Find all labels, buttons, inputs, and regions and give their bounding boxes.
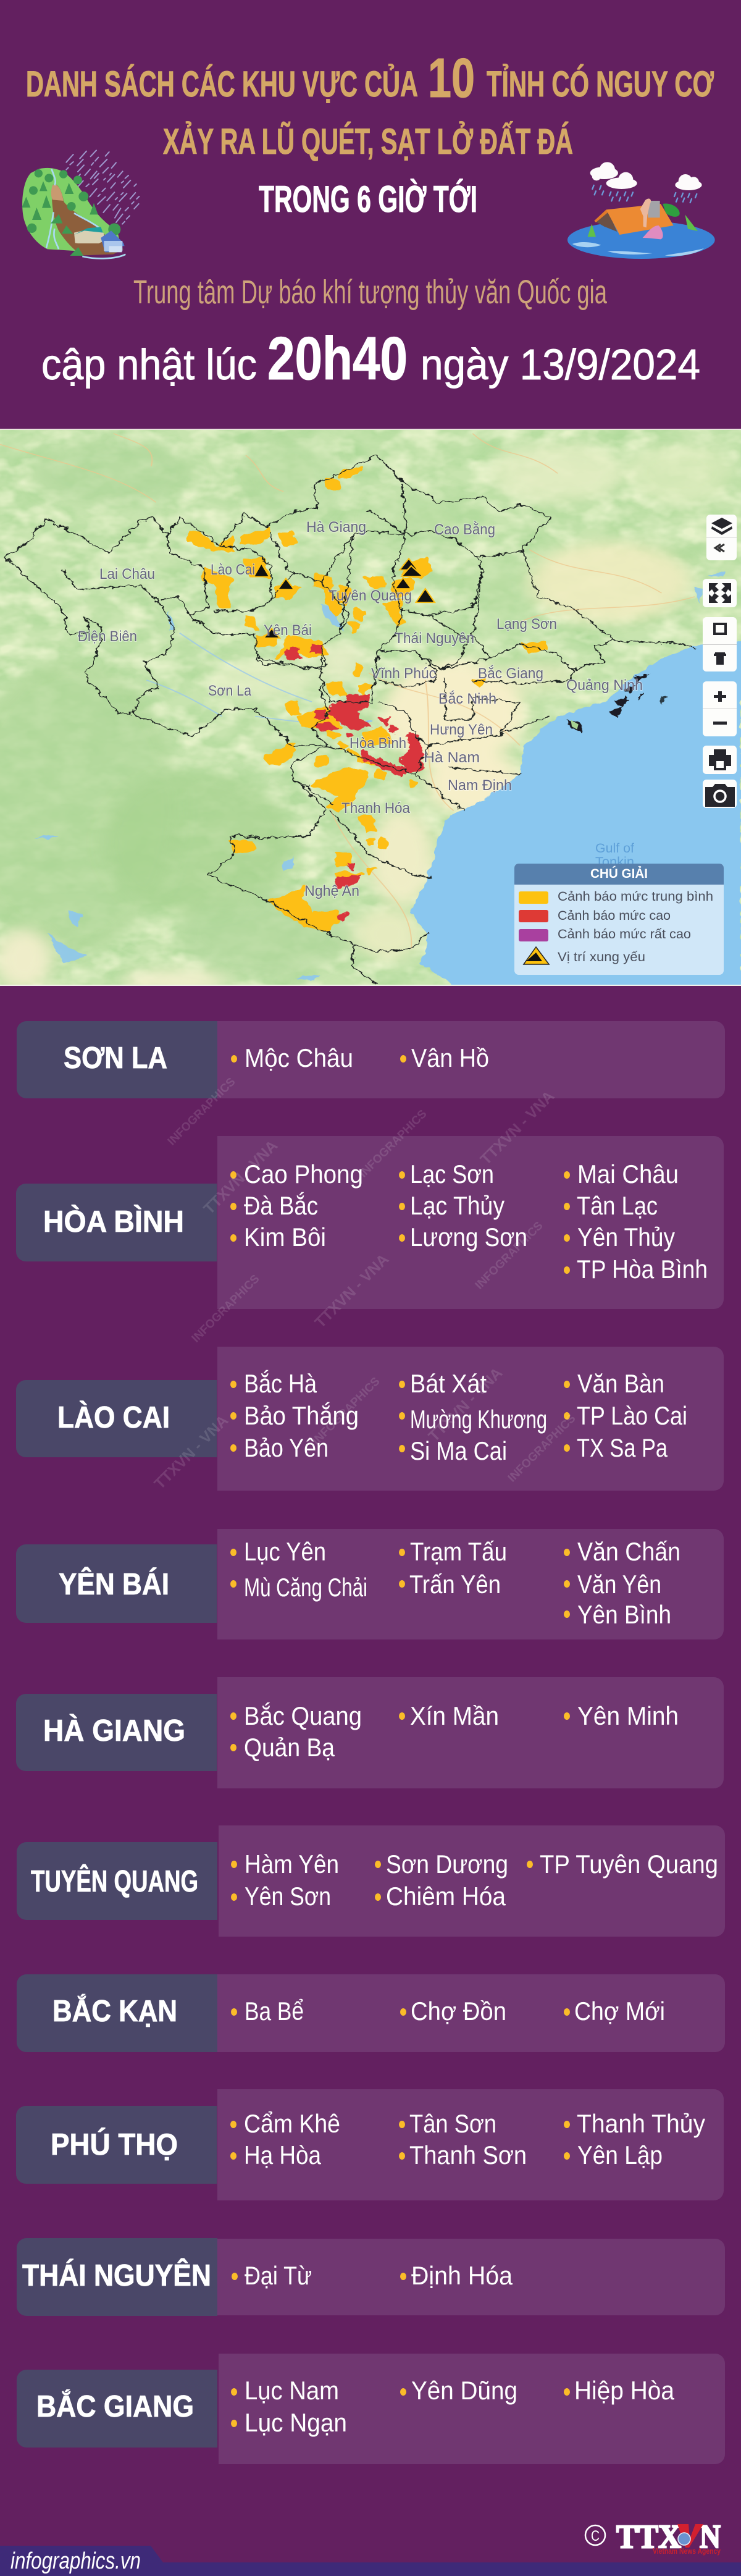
row: Sơn La	[17, 1021, 725, 1098]
row: Tuyên Quang: TUYÊN QUANG	[31, 1864, 198, 1898]
update time: 20h40	[267, 324, 408, 392]
sea	[411, 640, 741, 987]
row: Hòa Bình: Kim Bôi	[244, 1223, 326, 1252]
map legend: CHÚ GIẢI	[590, 866, 648, 881]
row: Bắc Kạn	[17, 1974, 725, 2052]
map place names: Hưng Yên	[430, 722, 493, 738]
row: Lào Cai: LÀO CAI	[57, 1401, 170, 1434]
title: DANH SÁCH CÁC KHU VỰC CỦA	[26, 64, 418, 104]
map place names: Bắc Ninh	[438, 691, 496, 707]
map place names: Tuyên Quang	[329, 587, 412, 604]
map legend: Vị trí xung yếu	[558, 950, 645, 964]
logo: TTXVN: TTX	[616, 2518, 681, 2555]
land mottling	[0, 426, 741, 992]
row: Sơn La: Mộc Châu	[245, 1043, 353, 1072]
map place names: Hà Giang	[306, 519, 366, 536]
map place names: Nam Định	[448, 777, 512, 794]
row: Lào Cai: Bảo Yên	[244, 1433, 329, 1462]
row: Hòa Bình: TP Hòa Bình	[577, 1255, 708, 1284]
row: Hòa Bình: Lạc Thủy	[410, 1191, 504, 1220]
row: Yên Bái: Trấn Yên	[409, 1570, 501, 1599]
row: Bắc Kạn: Chợ Đồn	[411, 1997, 506, 2026]
map place names: Nghệ An	[304, 883, 359, 899]
watermarks: INFOGRAPHICS	[190, 1273, 262, 1345]
map place names: Thái Nguyên	[395, 630, 474, 647]
row: Phú Thọ: Yên Lập	[577, 2140, 663, 2170]
row: Hòa Bình: Mai Châu	[577, 1160, 679, 1189]
row: Hà Giang: HÀ GIANG	[43, 1714, 185, 1748]
map place names: Lạng Sơn	[496, 616, 557, 633]
row: Hòa Bình: Cao Phong	[244, 1160, 363, 1189]
title: 10	[428, 48, 475, 109]
update time: cập nhật lúc	[41, 340, 257, 389]
subtitle: within 6 hours: TRONG 6 GIỜ TỚI	[259, 179, 477, 220]
land colour patches	[0, 437, 732, 992]
row: Lào Cai: Bắc Hà	[244, 1369, 317, 1398]
row: Lào Cai	[16, 1347, 724, 1491]
row: Hà Giang	[16, 1677, 724, 1788]
map legend: Cảnh báo mức cao	[558, 909, 671, 923]
row: Yên Bái: Yên Bình	[577, 1600, 671, 1629]
row: Hòa Bình: Lương Sơn	[410, 1223, 527, 1252]
footer band with website	[0, 2546, 741, 2576]
footer band with website: infographics.vn	[10, 2548, 141, 2574]
map legend: Cảnh báo mức rất cao	[558, 927, 691, 941]
watermarks: TTXVN - VNA	[425, 1364, 506, 1445]
row: Lào Cai: Si Ma Cai	[410, 1436, 507, 1465]
map place names: Tonkin	[595, 855, 634, 869]
map place names: Quảng Ninh	[566, 677, 643, 694]
row: Lào Cai: Bát Xát	[410, 1369, 487, 1398]
icon: landslide on hill with rain	[22, 150, 139, 258]
row: Thái Nguyên: Đại Từ	[245, 2261, 312, 2290]
map place names: Lai Châu	[99, 566, 155, 583]
watermarks: TTXVN - VNA	[477, 1087, 558, 1168]
thin white rule below the map	[0, 985, 741, 986]
watermarks: INFOGRAPHICS	[473, 1219, 546, 1292]
map place names: Yên Bái	[264, 622, 312, 639]
warning zones: medium level	[189, 468, 546, 930]
map place names: Gulf of	[595, 841, 634, 856]
row: Tuyên Quang: Yên Sơn	[245, 1882, 331, 1911]
row: Bắc Giang: Hiệp Hòa	[574, 2376, 675, 2405]
row: Tuyên Quang: Hàm Yên	[245, 1850, 339, 1879]
map place names: Vĩnh Phúc	[371, 665, 436, 682]
row: Thái Nguyên: Định Hóa	[411, 2261, 513, 2290]
watermarks: INFOGRAPHICS	[310, 1375, 383, 1448]
row: Tuyên Quang: Chiêm Hóa	[386, 1882, 506, 1911]
map legend	[514, 864, 724, 975]
row: Tuyên Quang	[17, 1825, 725, 1937]
roads and rivers	[0, 434, 695, 948]
row: Phú Thọ: Thanh Sơn	[409, 2140, 527, 2170]
update time	[41, 324, 700, 392]
map legend: Cảnh báo mức trung bình	[558, 890, 713, 904]
row: Hòa Bình: Lạc Sơn	[410, 1160, 494, 1189]
row: Phú Thọ: Cẩm Khê	[244, 2109, 340, 2138]
row: Hòa Bình: Yên Thủy	[577, 1223, 675, 1252]
logo: TTXVN: C	[591, 2528, 600, 2544]
map place names: Cao Bằng	[434, 521, 495, 538]
row: Yên Bái	[16, 1529, 724, 1639]
map of northern Vietnam	[0, 426, 741, 992]
row: Bắc Kạn: Ba Bể	[245, 1997, 304, 2026]
logo: TTXVN: N	[700, 2518, 721, 2555]
row: Yên Bái: Văn Chấn	[577, 1537, 680, 1566]
islands	[566, 673, 668, 733]
row: Sơn La: SƠN LA	[64, 1042, 167, 1075]
update time: ngày 13/9/2024	[421, 340, 700, 389]
row: Bắc Giang: BẮC GIANG	[36, 2389, 194, 2423]
map place names: Bắc Giang	[478, 665, 543, 682]
thin white rule above the map	[0, 429, 741, 430]
watermarks: INFOGRAPHICS	[357, 1108, 430, 1181]
row: Hà Giang: Yên Minh	[577, 1701, 679, 1730]
map place names: Lào Cai	[211, 562, 255, 578]
row: Bắc Giang: Yên Dũng	[411, 2376, 517, 2405]
row: Lào Cai: Bảo Thắng	[244, 1401, 359, 1430]
row: Bắc Giang	[17, 2354, 725, 2464]
vulnerable position markers	[254, 558, 435, 638]
row: Hà Giang: Bắc Quang	[244, 1701, 362, 1730]
row: Yên Bái: Văn Yên	[577, 1570, 661, 1599]
row: Bắc Giang: Lục Ngạn	[245, 2408, 347, 2437]
row: Tuyên Quang: TP Tuyên Quang	[540, 1850, 718, 1879]
map toolbar	[703, 515, 737, 808]
row: Hà Giang: Xín Mần	[410, 1701, 499, 1730]
row: Yên Bái: Trạm Tấu	[410, 1537, 507, 1566]
watermarks: INFOGRAPHICS	[506, 1412, 579, 1485]
row: Yên Bái: Lục Yên	[244, 1537, 326, 1566]
map place names: Hà Nam	[424, 749, 480, 766]
row: Hòa Bình	[16, 1136, 724, 1309]
row: Phú Thọ: Thanh Thủy	[577, 2109, 705, 2138]
map place names: Điện Biên	[78, 628, 137, 645]
map place names: Sơn La	[208, 683, 252, 699]
watermarks: TTXVN - VNA	[311, 1250, 392, 1331]
title	[26, 48, 714, 162]
logo: TTXVN	[585, 2518, 721, 2556]
row: Phú Thọ	[16, 2089, 724, 2200]
row: Phú Thọ: Hạ Hòa	[244, 2140, 322, 2170]
row: Sơn La: Vân Hồ	[411, 1043, 489, 1072]
icon: flooded house with clouds	[567, 162, 715, 259]
watermarks	[151, 1075, 579, 1492]
map place names: Thanh Hóa	[341, 800, 411, 817]
warning zones: high level	[286, 646, 423, 919]
row: Hòa Bình: HÒA BÌNH	[43, 1205, 184, 1239]
row: Phú Thọ: Tân Sơn	[409, 2109, 496, 2138]
row: Tuyên Quang: Sơn Dương	[386, 1850, 508, 1879]
row: Thái Nguyên: THÁI NGUYÊN	[22, 2258, 211, 2292]
watermarks: INFOGRAPHICS	[165, 1075, 238, 1148]
watermarks: TTXVN - VNA	[200, 1137, 281, 1218]
row: Lào Cai: TP Lào Cai	[577, 1401, 687, 1430]
row: Bắc Kạn: BẮC KẠN	[52, 1994, 177, 2028]
row: Hà Giang: Quản Bạ	[244, 1733, 335, 1762]
row: Bắc Giang: Lục Nam	[245, 2376, 339, 2405]
row: Lào Cai: Văn Bàn	[577, 1369, 664, 1398]
logo: TTXVN: Vietnam News Agency	[653, 2546, 721, 2556]
watermarks: TTXVN - VNA	[151, 1412, 232, 1492]
row: Bắc Kạn: Chợ Mới	[574, 1997, 665, 2026]
map place names: Hòa Bình	[350, 735, 406, 752]
map place names	[78, 519, 643, 899]
province borders	[5, 455, 695, 985]
row: Lào Cai: TX Sa Pa	[577, 1433, 668, 1462]
title: XẢY RA LŨ QUÉT, SẠT LỞ ĐẤT ĐÁ	[163, 122, 573, 162]
row: Thái Nguyên	[17, 2238, 725, 2316]
row: Yên Bái: Mù Căng Chải	[244, 1573, 367, 1602]
row: Phú Thọ: PHÚ THỌ	[51, 2128, 178, 2161]
row: Yên Bái: YÊN BÁI	[59, 1567, 169, 1601]
row: Hòa Bình: Đà Bắc	[244, 1191, 318, 1220]
row: Hòa Bình: Tân Lạc	[577, 1191, 658, 1220]
row: Lào Cai: Mường Khương	[410, 1405, 547, 1434]
